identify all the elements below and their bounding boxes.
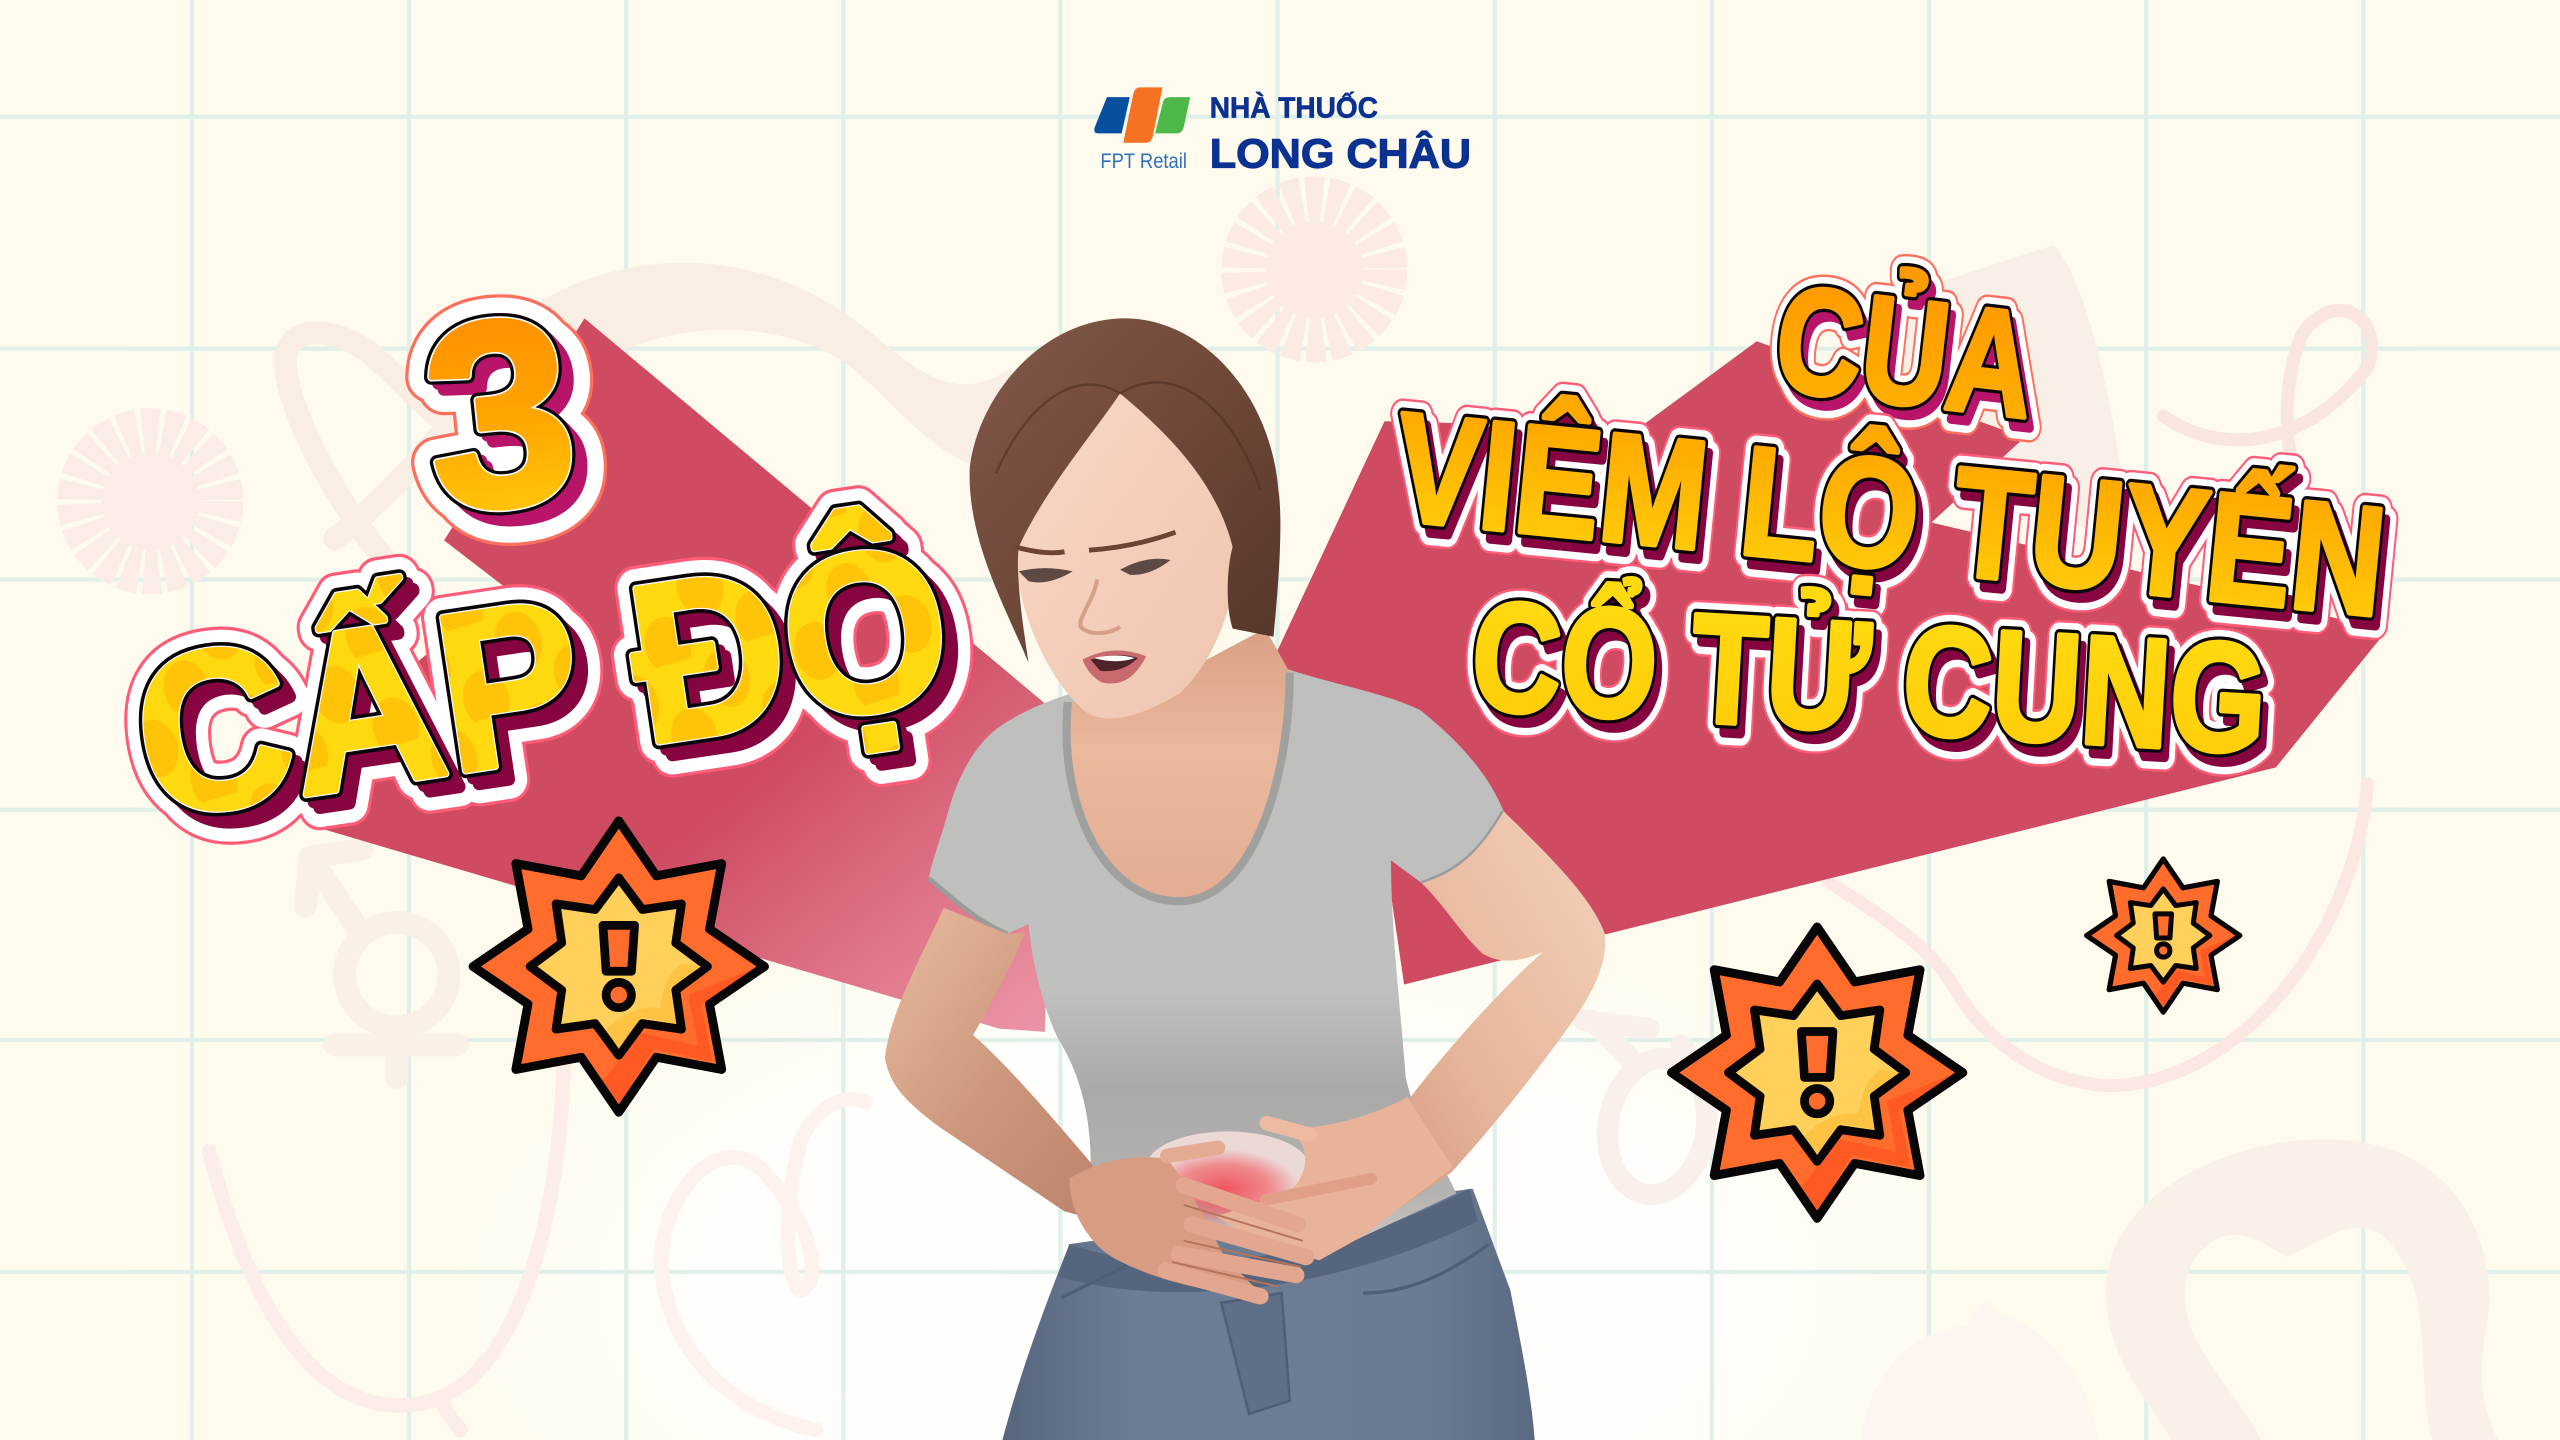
faint flower left	[85, 436, 216, 567]
mouth	[1082, 651, 1146, 684]
title: co tu cung: CỔ TỬ CUNG	[1474, 579, 2277, 796]
face	[1016, 392, 1241, 718]
title: co tu cung: CỔ TỬ CUNG	[1468, 569, 2271, 786]
title: cap do: CẤP ĐỘ	[134, 508, 978, 878]
ear	[1236, 496, 1272, 588]
faint uterus top left	[285, 333, 552, 563]
title: 3: 3	[424, 272, 601, 581]
title: 3: 3	[411, 260, 588, 569]
title: cap do: CẤP ĐỘ	[134, 508, 978, 878]
stomach pain area	[1146, 1131, 1309, 1203]
title: 3: 3	[411, 260, 588, 569]
title: co tu cung: CỔ TỬ CUNG	[1468, 569, 2271, 786]
FPT mark	[1094, 87, 1190, 143]
title: cua: CỦA	[1773, 264, 2049, 460]
eyes	[1019, 559, 1171, 582]
Nha thuoc text: NHÀ THUỐC	[1210, 91, 1378, 125]
faint uterus body top	[539, 263, 1012, 473]
shirt collar	[1067, 673, 1290, 901]
faint uterus shape right	[1853, 245, 2131, 539]
title: cap do: CẤP ĐỘ	[128, 503, 972, 873]
title: co tu cung: CỔ TỬ CUNG	[1468, 569, 2271, 786]
icon: warning burst left	[473, 821, 764, 1112]
title: cua: CỦA	[1768, 253, 2043, 450]
FPT Retail text: FPT Retail	[1100, 150, 1187, 173]
title: co tu cung: CỔ TỬ CUNG	[1474, 579, 2277, 796]
faint loop top right	[2163, 310, 2372, 539]
title: 3: 3	[424, 272, 601, 581]
icon: warning burst center right	[1671, 927, 1963, 1218]
title: cap do: CẤP ĐỘ	[120, 496, 965, 865]
pain redness	[1149, 1149, 1300, 1228]
icon: warning burst small right	[2087, 859, 2240, 1012]
nose	[1080, 580, 1120, 633]
title: 3: 3	[419, 266, 596, 575]
faint flower top	[1249, 204, 1380, 335]
faint stethoscope curve left	[209, 1020, 564, 1430]
title: cua: CỦA	[1768, 253, 2043, 450]
background glow	[294, 784, 2122, 1440]
woman illustration	[885, 318, 1605, 1440]
sleeve hems	[929, 811, 1504, 934]
title: cap do: CẤP ĐỘ	[120, 496, 965, 865]
faint apple bottom	[1861, 1302, 2098, 1440]
eyebrows	[1016, 532, 1176, 553]
faint uterus bottom right	[2106, 1139, 2498, 1440]
Long Chau text: LONG CHÂU	[1210, 130, 1471, 176]
hair	[970, 318, 1280, 663]
neck and chest skin	[1067, 629, 1290, 901]
right hand	[1216, 1097, 1453, 1260]
title: cap do: CẤP ĐỘ	[134, 508, 978, 878]
title: cua: CỦA	[1773, 264, 2049, 460]
left hand	[1069, 1148, 1306, 1298]
faint gender symbol right	[1584, 1020, 1717, 1203]
title: co tu cung: CỔ TỬ CUNG	[1474, 579, 2277, 796]
title: cua: CỦA	[1773, 264, 2049, 460]
title: cap do: CẤP ĐỘ	[120, 496, 965, 865]
title: cap do: CẤP ĐỘ	[120, 496, 965, 865]
title: cua: CỦA	[1768, 253, 2043, 450]
title: 3: 3	[411, 260, 588, 569]
left arm	[885, 908, 1127, 1228]
faint heart loops	[661, 1099, 865, 1430]
pants	[1002, 1189, 1535, 1440]
title: co tu cung: CỔ TỬ CUNG	[1468, 569, 2271, 786]
title: cap do: CẤP ĐỘ	[120, 496, 965, 865]
faint gender symbol left	[305, 849, 457, 1078]
faint curve right	[1829, 784, 2367, 1086]
title: 3: 3	[424, 272, 601, 581]
title: 3: 3	[411, 260, 588, 569]
logo: Nhà thuốc Long Châu	[1094, 87, 1471, 176]
title: cua: CỦA	[1768, 253, 2043, 450]
shirt torso	[929, 669, 1504, 1252]
title: 3: 3	[411, 260, 588, 569]
right ribbon	[1270, 341, 2387, 984]
right arm	[1371, 811, 1605, 1228]
left ribbon	[318, 318, 1053, 1032]
